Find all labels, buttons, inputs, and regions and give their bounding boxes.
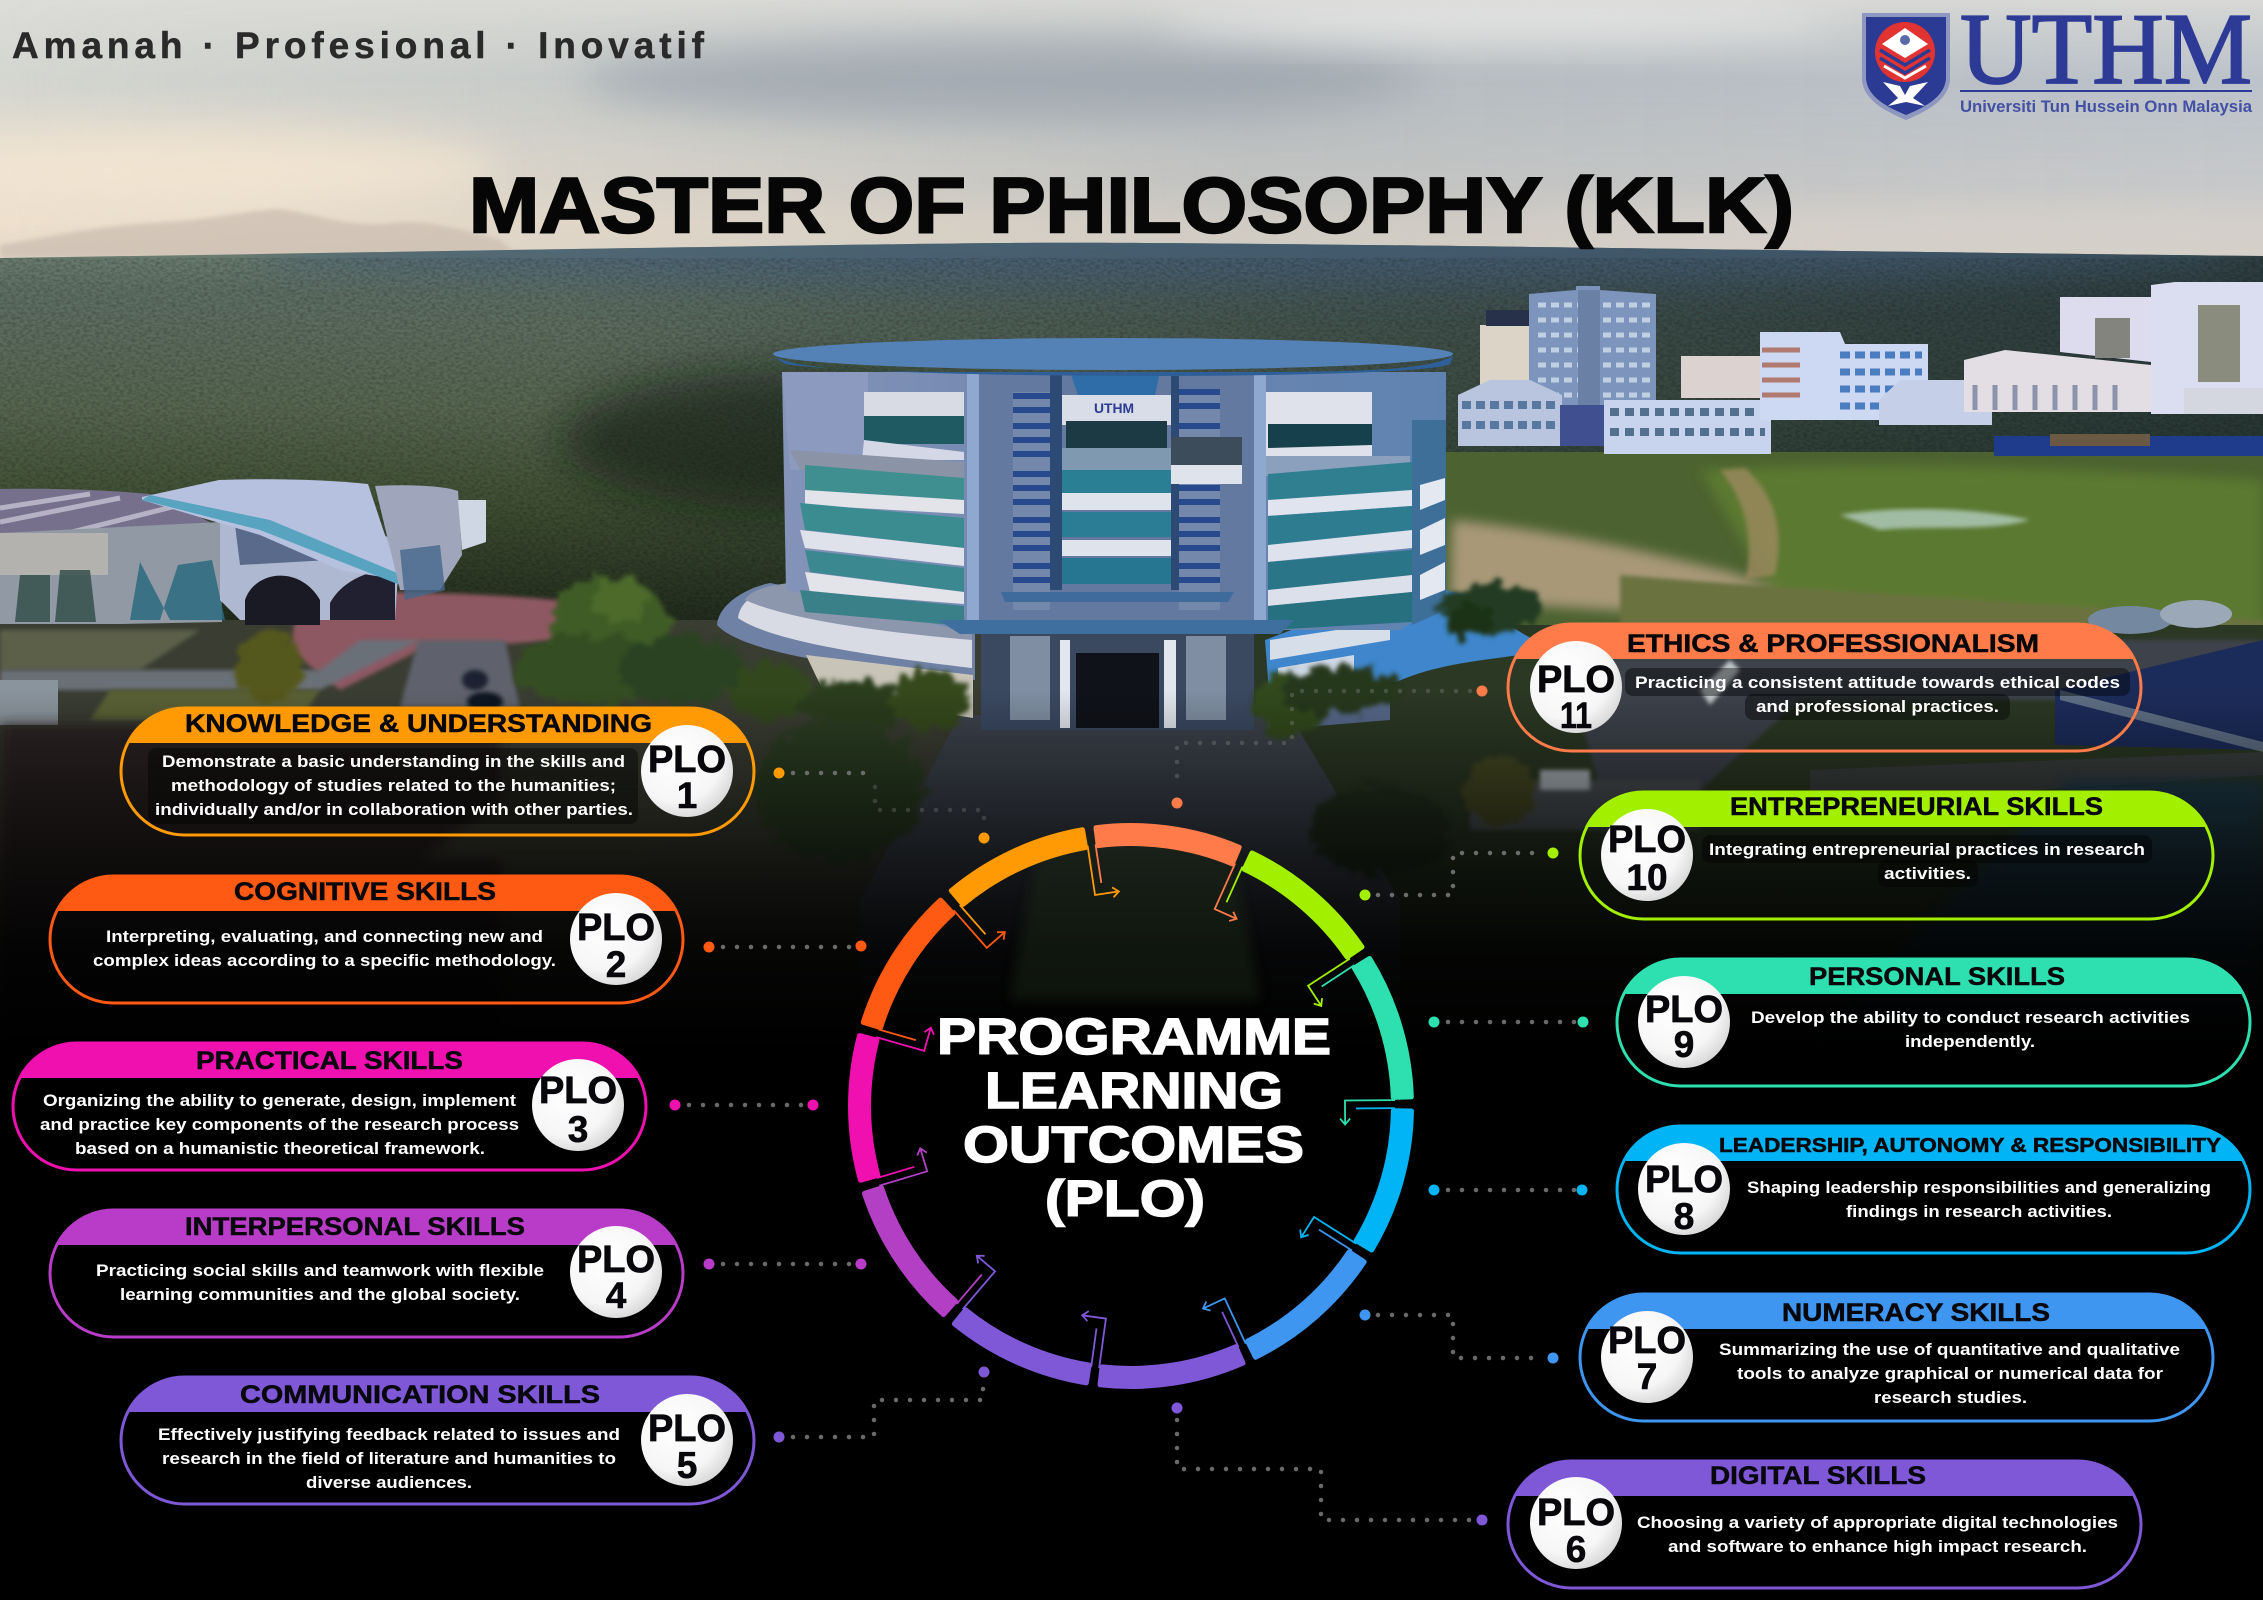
badge: PLO [1645, 989, 1723, 1031]
chart: PLO ring of eleven segments [850, 818, 1421, 1394]
palm oil forest [0, 242, 2263, 620]
panel: PLO 7 numeracy skills [1580, 1293, 2213, 1421]
right base ring [1265, 585, 1550, 705]
description: diverse audiences. [306, 1473, 472, 1492]
header band [56, 1209, 677, 1245]
header band [19, 1042, 640, 1078]
badge [1638, 976, 1730, 1068]
panel: PLO 3 practical skills [13, 1042, 646, 1170]
panel: PLO 4 interpersonal skills [50, 1209, 683, 1337]
tower body [782, 372, 1446, 630]
badge: 8 [1674, 1196, 1694, 1237]
right campus buildings [1458, 282, 2263, 456]
badge [1530, 1477, 1622, 1570]
sky [0, 0, 2263, 262]
heading: NUMERACY SKILLS [1782, 1299, 2050, 1327]
clockwise flow arrows between segments [872, 842, 1395, 1368]
gazebos [2088, 606, 2172, 634]
panel: PLO 1 knowledge and understanding [121, 707, 754, 835]
faint tree avenue inside ring [1010, 840, 1260, 1000]
badge: PLO [1537, 1492, 1615, 1534]
description: Interpreting, evaluating, and connecting new and [106, 927, 543, 946]
description [1719, 1340, 2180, 1407]
logo: UTHM [1862, 0, 2253, 120]
centre heading: Programme Learning Outcomes (PLO) [937, 1008, 1331, 1227]
main UTHM building [717, 338, 1550, 730]
badge: 3 [568, 1109, 588, 1150]
panel: PLO 6 digital skills [1508, 1460, 2141, 1588]
badge [1601, 809, 1693, 901]
badge: PLO [1537, 659, 1615, 701]
panel: PLO 11 ethics and professionalism [1508, 623, 2141, 751]
arena building [0, 479, 486, 625]
left grounds [0, 620, 1000, 1055]
description [1625, 668, 2130, 720]
description: and professional practices. [1756, 697, 1999, 716]
description: Shaping leadership responsibilities and generalizing [1747, 1178, 2211, 1197]
left base ring [717, 583, 975, 680]
badge: PLO [648, 1408, 726, 1450]
heading: KNOWLEDGE & UNDERSTANDING [185, 710, 652, 738]
badge: 4 [606, 1275, 627, 1316]
heading: ETHICS & PROFESSIONALISM [1627, 630, 2039, 658]
description: Practicing a consistent attitude towards ethical codes [1635, 673, 2120, 692]
description: research studies. [1874, 1388, 2027, 1407]
badge [1638, 1143, 1730, 1237]
badge: 7 [1637, 1356, 1657, 1397]
description: methodology of studies related to the humanities; [171, 776, 616, 795]
centre heading: Programme Learning Outcomes (PLO): OUTCOMES [963, 1116, 1304, 1173]
centre heading: Programme Learning Outcomes (PLO): (PLO) [1045, 1170, 1205, 1227]
description [1702, 835, 2152, 887]
entrance [981, 634, 1254, 730]
university name: Universiti Tun Hussein Onn Malaysia [1960, 97, 2253, 116]
description: Develop the ability to conduct research activities [1751, 1008, 2190, 1027]
description [1747, 1178, 2211, 1221]
badge: PLO [1608, 819, 1686, 861]
badge [641, 725, 733, 817]
description [93, 927, 556, 970]
badge [570, 1226, 662, 1318]
badge: 10 [1626, 857, 1668, 898]
description: tools to analyze graphical or numerical data for [1737, 1364, 2163, 1383]
heading: DIGITAL SKILLS [1710, 1462, 1926, 1490]
badge: PLO [577, 1239, 655, 1281]
panel: PLO 10 entrepreneurial skills [1580, 791, 2213, 919]
description: based on a humanistic theoretical framework. [75, 1139, 485, 1158]
icon: UTHM shield [1862, 13, 1950, 120]
header band [127, 707, 748, 743]
badge: 2 [606, 944, 626, 985]
centre heading: Programme Learning Outcomes (PLO): LEARNING [985, 1062, 1283, 1119]
darkening overlay [0, 690, 2263, 1050]
roof [773, 338, 1453, 370]
panel: PLO 2 cognitive skills [50, 875, 683, 1003]
description: independently. [1905, 1032, 2035, 1051]
badge [641, 1394, 733, 1486]
badge [1601, 1311, 1693, 1403]
badge [570, 893, 662, 985]
description: Choosing a variety of appropriate digital technologies [1637, 1513, 2118, 1532]
badge [1530, 641, 1622, 736]
description [1637, 1513, 2118, 1556]
description: Practicing social skills and teamwork with flexible [96, 1261, 544, 1280]
description: learning communities and the global society. [120, 1285, 520, 1304]
badge: 1 [677, 775, 697, 816]
badge: PLO [1645, 1159, 1723, 1201]
ground and field [0, 452, 2263, 1055]
dotted connectors [689, 691, 1575, 1520]
badge: 5 [677, 1445, 697, 1486]
heading: PERSONAL SKILLS [1809, 963, 2065, 991]
header band [1585, 1293, 2206, 1329]
badge [532, 1059, 624, 1151]
description [40, 1091, 519, 1158]
header band [1514, 1460, 2135, 1496]
panel: PLO 5 communication skills [121, 1376, 754, 1504]
badge: 9 [1674, 1024, 1694, 1065]
heading: COGNITIVE SKILLS [234, 878, 496, 906]
badge: 11 [1560, 695, 1592, 736]
description: Demonstrate a basic understanding in the skills and [162, 752, 625, 771]
heading: PRACTICAL SKILLS [196, 1047, 463, 1075]
ring segments [850, 818, 1421, 1394]
badge: PLO [648, 739, 726, 781]
left wing floors [864, 392, 964, 422]
centre heading: Programme Learning Outcomes (PLO): PROGRAMME [937, 1008, 1331, 1065]
description [158, 1425, 620, 1492]
small UTHM sign: UTHM [1094, 400, 1134, 416]
description: and software to enhance high impact research. [1668, 1537, 2087, 1556]
description [148, 748, 638, 824]
description: findings in research activities. [1846, 1202, 2112, 1221]
central plaza road [860, 715, 1400, 1055]
header band [127, 1376, 748, 1412]
heading: LEADERSHIP, AUTONOMY & RESPONSIBILITY [1719, 1135, 2222, 1157]
description: complex ideas according to a specific methodology. [93, 951, 556, 970]
right wing floors [1265, 392, 1372, 470]
description: and practice key components of the research process [40, 1115, 519, 1134]
header band [1623, 958, 2244, 994]
canopies [1001, 592, 1234, 602]
panel: PLO 9 personal skills [1617, 958, 2250, 1086]
heading: ENTREPRENEURIAL SKILLS [1730, 793, 2103, 821]
heading: COMMUNICATION SKILLS [240, 1381, 600, 1409]
description [1751, 1008, 2190, 1051]
description [96, 1261, 544, 1304]
description: Integrating entrepreneurial practices in research [1709, 840, 2145, 859]
header band [1623, 1125, 2244, 1161]
tagline: Amanah · Profesional · Inovatif [12, 25, 705, 66]
cars in the car park [462, 660, 1740, 790]
title: MASTER OF PHILOSOPHY (KLK) [469, 161, 1794, 249]
header band [1585, 791, 2206, 827]
heading: INTERPERSONAL SKILLS [185, 1213, 525, 1241]
badge: PLO [539, 1070, 617, 1112]
trees around the plaza [234, 577, 1540, 875]
badge: PLO [577, 907, 655, 949]
distant mountains [0, 209, 520, 258]
badge: 6 [1566, 1529, 1586, 1570]
description: Organizing the ability to generate, design, implement [43, 1091, 516, 1110]
connector end dots [670, 686, 1588, 1526]
panel: PLO 8 leadership, autonomy and responsibility [1617, 1125, 2250, 1253]
description: activities. [1884, 864, 1971, 883]
lower right grounds [1240, 625, 2263, 1055]
description: individually and/or in collaboration with other parties. [155, 800, 633, 819]
description: Effectively justifying feedback related to issues and [158, 1425, 620, 1444]
centre block [967, 372, 1266, 634]
description: research in the field of literature and humanities to [162, 1449, 616, 1468]
badge: PLO [1608, 1320, 1686, 1362]
header band [56, 875, 677, 911]
header band [1514, 623, 2135, 659]
description: Summarizing the use of quantitative and qualitative [1719, 1340, 2180, 1359]
